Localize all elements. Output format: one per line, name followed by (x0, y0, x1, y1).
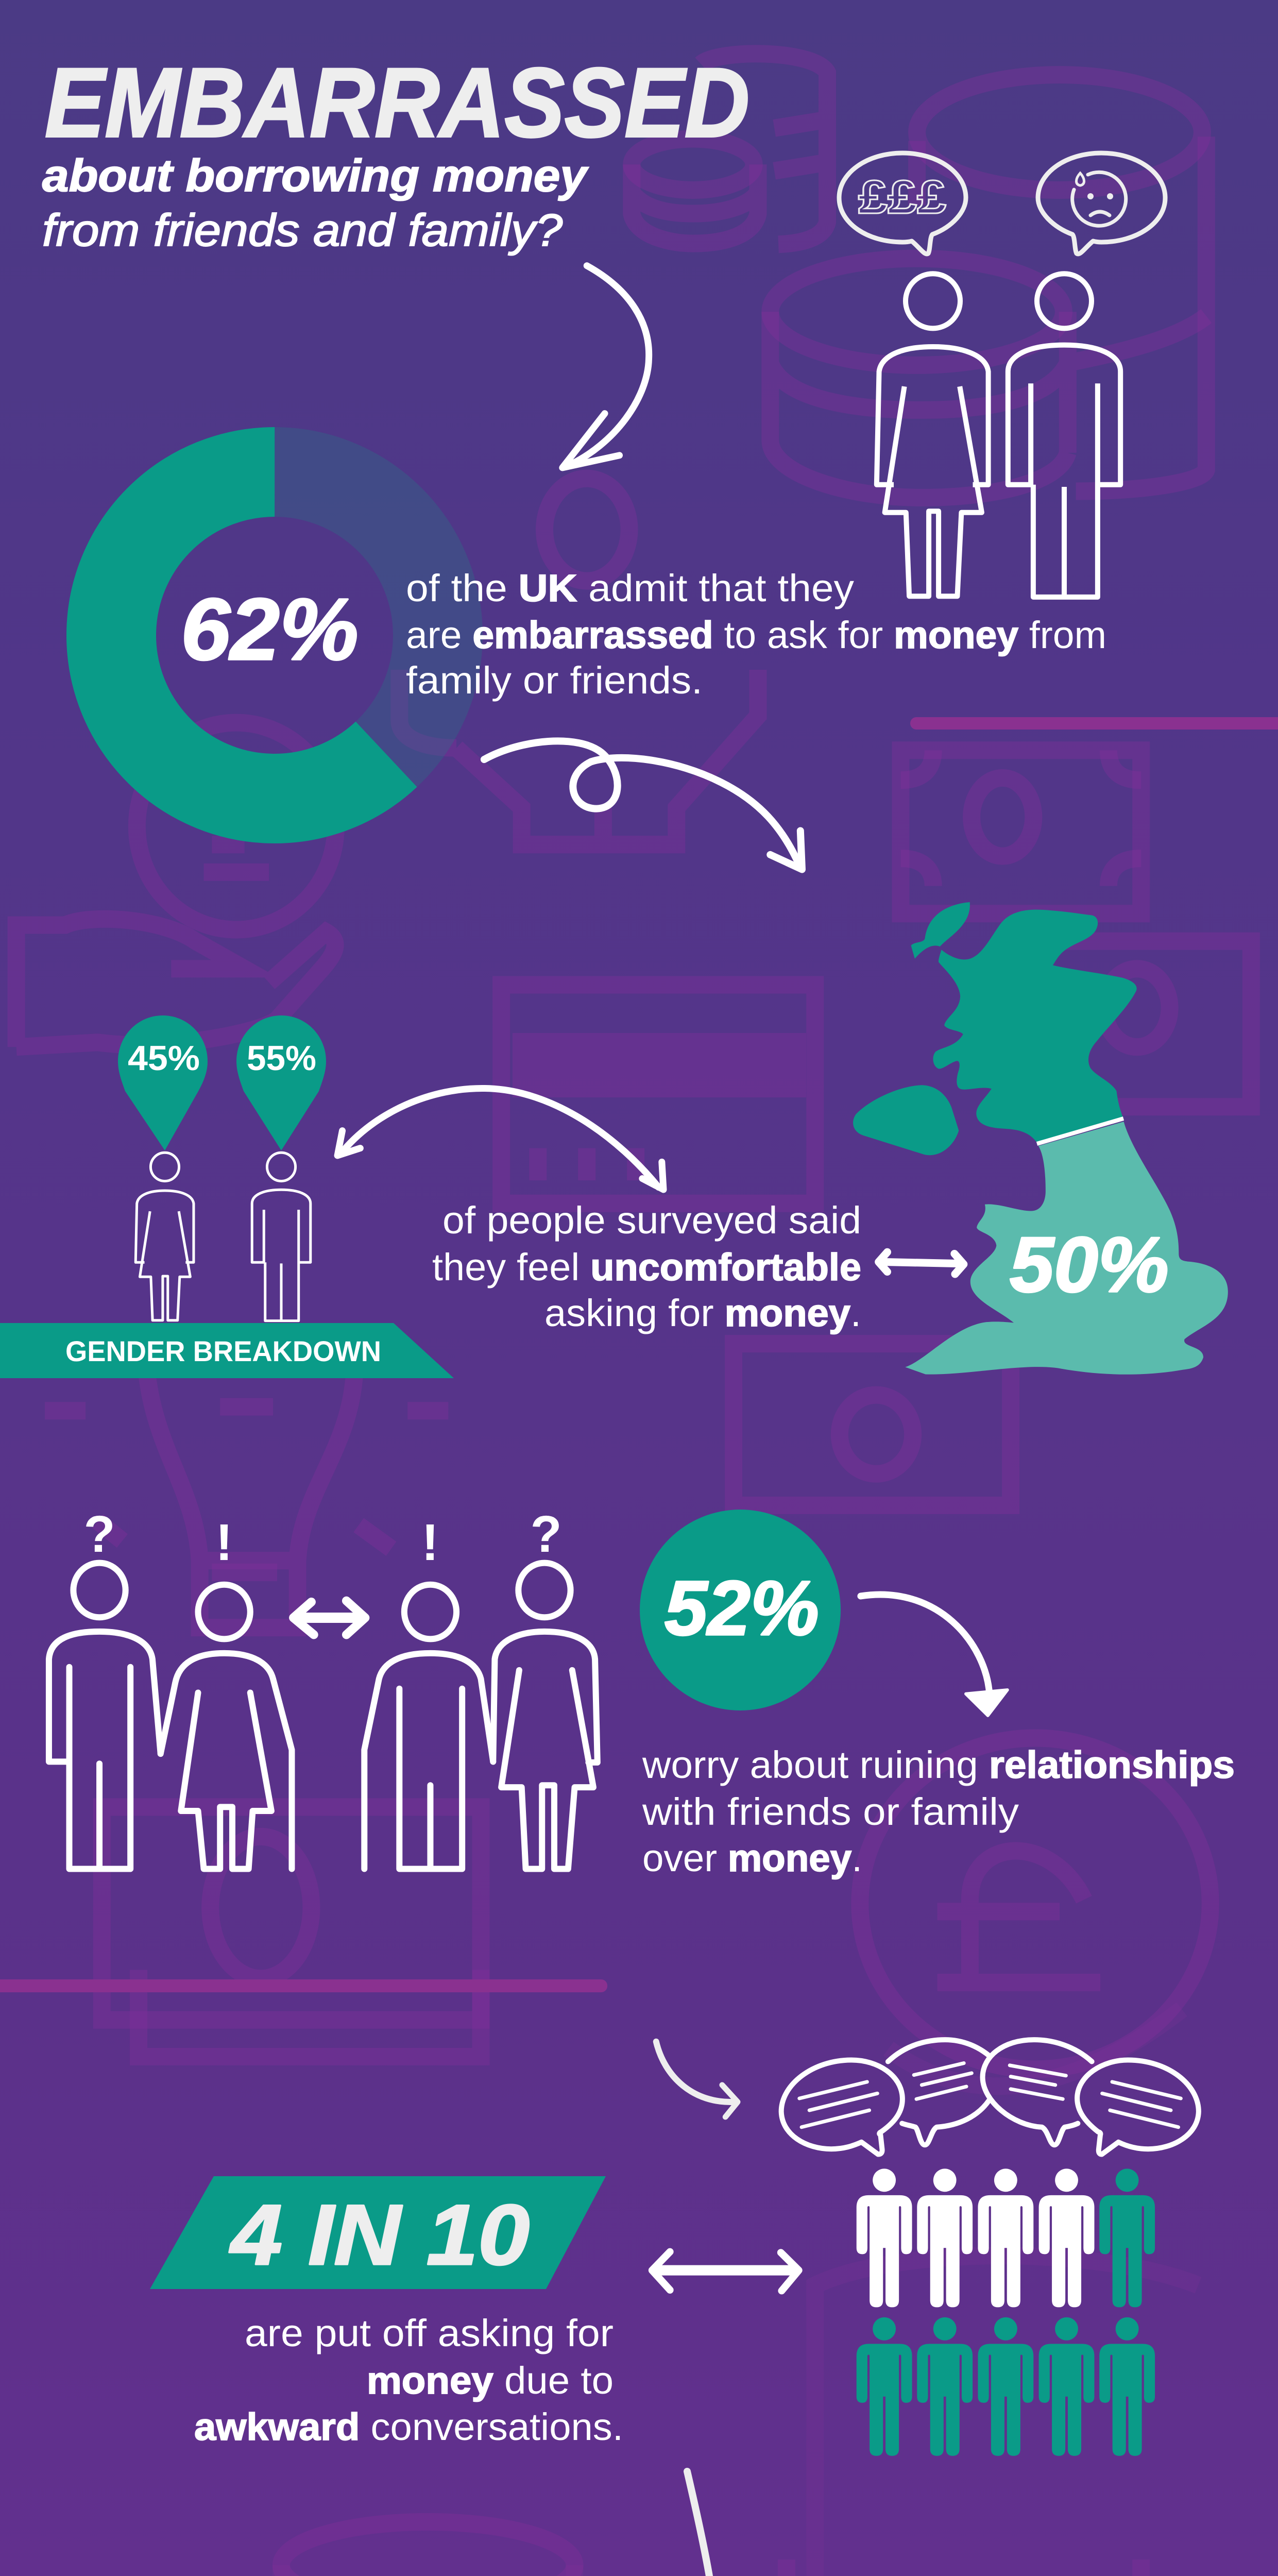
text: relationships: worry about ruining relationships (642, 1743, 1235, 1786)
text: awkward conversations: money due to (367, 2359, 614, 2402)
banner: gender breakdown: GENDER BREAKDOWN (65, 1335, 381, 1367)
icon: two couples (49, 1505, 598, 1869)
text: relationships (642, 1743, 1235, 1879)
text: uncomfortable: asking for money. (544, 1292, 861, 1334)
arrow: loop (484, 741, 802, 870)
map: UK 50% (853, 902, 1228, 1375)
stat: 52% circle: 52% (664, 1565, 819, 1651)
marks: question and exclamation: ? (530, 1505, 562, 1563)
marks: question and exclamation (83, 1505, 562, 1571)
map: UK 50%: 50% (1010, 1221, 1169, 1309)
marks: question and exclamation: ! (421, 1514, 439, 1571)
text: uncomfortable: of people surveyed said (442, 1199, 861, 1242)
text: relationships: over money. (642, 1837, 862, 1879)
text: awkward conversations: are put off asking for (245, 2312, 614, 2354)
title: EMBARRASSED (45, 48, 749, 158)
panel: gender breakdown (0, 1015, 454, 1378)
icon: man right (364, 1585, 493, 1869)
arrow: title to donut (563, 266, 649, 468)
icon: man left (49, 1563, 161, 1869)
text: UK embarrassed: family or friends. (406, 659, 703, 702)
text: UK embarrassed: of the UK admit that they (406, 567, 854, 609)
subtitle: about borrowing money (42, 150, 589, 201)
icon: 4 in 10 people (857, 2168, 1155, 2456)
icon: speech bubble pounds: £££ (858, 171, 946, 224)
text: UK embarrassed: are embarrassed to ask for money from (406, 614, 1106, 656)
stat: 4 in 10 (150, 2176, 606, 2289)
arrow: 52% down (861, 1595, 1008, 1716)
text: awkward conversations (194, 2312, 623, 2448)
marks: question and exclamation: ! (215, 1514, 233, 1571)
arrow: to speech bubbles (656, 2042, 738, 2117)
icon: couple with speech bubbles (839, 153, 1165, 597)
icon: pin 55%: 55% (247, 1039, 316, 1078)
text: awkward conversations: awkward conversations. (194, 2405, 623, 2448)
divider (0, 1979, 607, 1992)
icon: man (1008, 274, 1120, 597)
text: relationships: with friends or family (642, 1790, 1019, 1833)
icon: speech bubble pounds (839, 153, 966, 254)
icon: small woman (135, 1153, 194, 1320)
banner: gender breakdown (0, 1323, 454, 1378)
arrow: 4 in 10 double (652, 2252, 799, 2291)
icon: woman left (161, 1585, 292, 1869)
icon: woman (877, 274, 989, 596)
map: upper UK (853, 902, 1137, 1155)
arrow: straight double 50% (879, 1252, 964, 1274)
marks: question and exclamation: ? (83, 1505, 115, 1563)
icon: pin 45% (118, 1015, 208, 1150)
arrow: curved double (337, 1088, 663, 1190)
stat: 52% circle (640, 1510, 841, 1710)
subtitle: from friends and family? (42, 205, 563, 256)
text: uncomfortable: they feel uncomfortable (432, 1246, 861, 1289)
icon: woman right (493, 1563, 598, 1869)
chart: 62% donut (44, 404, 505, 866)
icon: small man (252, 1153, 311, 1321)
text: UK embarrassed (406, 567, 1106, 702)
chart: 62% donut: 62% (181, 581, 359, 679)
divider (910, 717, 1278, 730)
stat: 4 in 10: 4 IN 10 (229, 2188, 530, 2283)
arrow: down to trust (687, 2471, 744, 2576)
map: lower UK (905, 1122, 1228, 1375)
icon: speech bubble sad face (1038, 153, 1165, 254)
arrow: couples double (294, 1601, 365, 1635)
icon: speech bubbles (781, 2040, 1199, 2154)
icon: pin 55% (236, 1015, 326, 1150)
subtitle (42, 150, 589, 256)
text: uncomfortable (432, 1199, 861, 1334)
icon: pin 45%: 45% (128, 1039, 200, 1078)
